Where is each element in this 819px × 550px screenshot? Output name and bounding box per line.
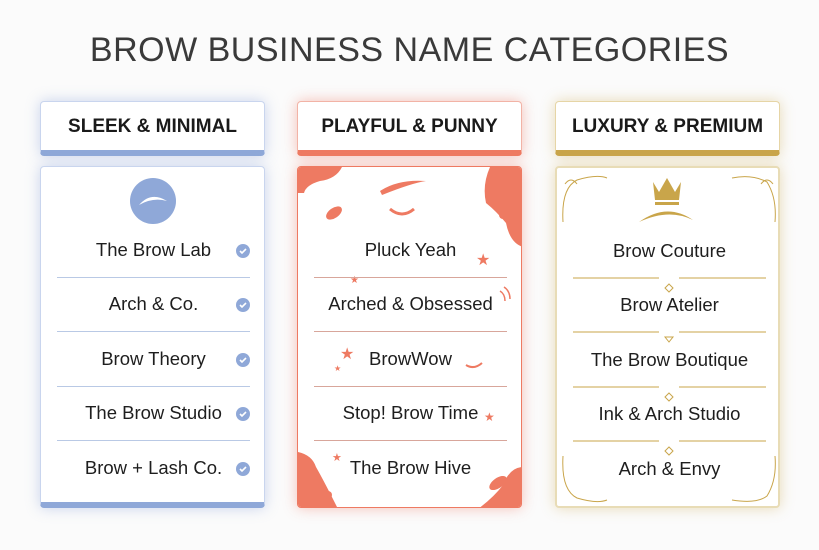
list: sleek: Brow + Lash Co. (85, 457, 222, 478)
heading: sleek (40, 101, 265, 156)
list: luxury: The Brow Boutique (591, 349, 748, 370)
heading: sleek: SLEEK & MINIMAL (68, 116, 237, 137)
heading: playful: PLAYFUL & PUNNY (321, 116, 498, 137)
list: sleek: Brow Theory (101, 348, 206, 369)
list: luxury: Ink & Arch Studio (599, 403, 740, 424)
list: playful: Pluck Yeah (365, 239, 456, 260)
decorative blobs: ★ (350, 275, 359, 286)
list: playful (297, 166, 522, 508)
panel: sleek & minimal (34, 94, 272, 514)
list: sleek: The Brow Lab (96, 239, 211, 260)
list: sleek: Arch & Co. (109, 293, 198, 314)
list: playful: Stop! Brow Time (343, 402, 478, 423)
list: playful: The Brow Hive (350, 457, 471, 478)
decorative blobs: ★ (332, 452, 342, 464)
heading: playful (297, 101, 522, 156)
panel: luxury & premium (547, 93, 788, 516)
icon: crown and brow (562, 176, 776, 502)
decorative blobs: ★ (484, 410, 495, 424)
decorative blobs (298, 167, 521, 507)
list: playful: BrowWow (369, 348, 452, 369)
panel: playful & punny (289, 93, 530, 516)
list: playful: Arched & Obsessed (328, 293, 493, 314)
list: sleek (40, 166, 265, 508)
icon: brow circle (130, 178, 176, 224)
decorative blobs: ★ (476, 252, 490, 269)
list: luxury (555, 166, 780, 508)
list: luxury: Brow Atelier (620, 294, 719, 315)
icons: checks (236, 244, 250, 476)
decorative blobs: ★ (334, 364, 341, 373)
list: sleek: The Brow Studio (85, 402, 222, 423)
list: luxury: Brow Couture (613, 240, 726, 261)
heading: luxury (555, 101, 780, 156)
heading: luxury: LUXURY & PREMIUM (572, 116, 763, 137)
decorative blobs: ★ (340, 346, 354, 363)
title: BROW BUSINESS NAME CATEGORIES (90, 31, 729, 69)
list: luxury: Arch & Envy (619, 458, 720, 479)
